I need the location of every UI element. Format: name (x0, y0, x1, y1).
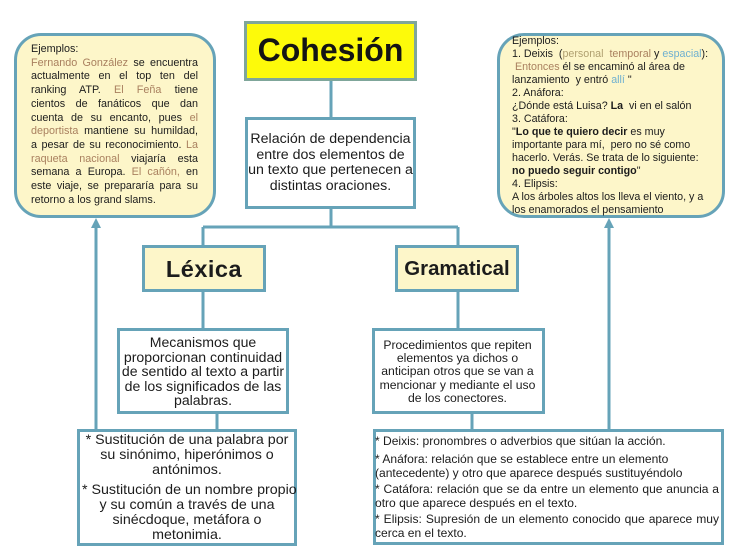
Léxica examples text (82, 432, 297, 543)
Léxica examples text: su sinónimo, hiperónimos o (100, 447, 274, 463)
left examples text: Fernando González se encuentra (31, 57, 198, 69)
right examples text: 1. Deixis (personal temporal y espacial): (512, 48, 708, 60)
Gramatical examples text: (antecedente) y otro que aparece después sustituyéndolo (375, 466, 682, 480)
Léxica description text: de los significados de las (125, 378, 281, 394)
left examples text: cuenta de su encanto, pues el (31, 112, 198, 124)
definition text: distintas oraciones. (270, 178, 391, 194)
right examples text: los enamorados el pensamiento (512, 204, 664, 216)
Gramatical examples text: otro que aparece después en el texto. (375, 496, 577, 510)
left examples text: a pesar de su reconocimiento. La (31, 139, 198, 151)
Gramatical examples text: * Catáfora: relación que se da entre un elemento que anuncia a (375, 482, 719, 496)
definition box (245, 117, 416, 209)
left examples text: ranking ATP. El Feña tiene (31, 84, 198, 96)
Léxica description text: palabras. (174, 392, 232, 408)
right examples text (512, 35, 708, 216)
Léxica examples text: metonimia. (152, 527, 222, 543)
right examples text: "Lo que te quiero decir es muy (512, 126, 665, 138)
left examples text: Ejemplos: (31, 43, 78, 55)
Gramatical description text: mencionar y mediante el uso (380, 378, 535, 392)
Léxica description text: proporcionan continuidad (124, 349, 282, 365)
right examples text: no puedo seguir contigo" (512, 165, 640, 177)
right examples text: lanzamiento y entró allí " (512, 74, 632, 86)
left examples text (31, 43, 198, 206)
left examples panel (14, 33, 216, 218)
Gramatical examples text (375, 434, 719, 540)
left examples text: semana a Europa. El cañón, en (31, 166, 198, 178)
Gramatical examples text: * Elipsis: Supresión de un elemento conocido que aparece muy (375, 512, 719, 526)
left examples text: deportista mantiene su humildad, (31, 125, 198, 137)
Gramatical description text (380, 338, 535, 405)
heading: Gramatical: Gramatical (404, 258, 510, 280)
Léxica examples box (77, 429, 297, 546)
heading box: Léxica (142, 245, 266, 292)
Léxica description box (117, 328, 289, 414)
right examples text: importante para mí, pero no sé como (512, 139, 690, 151)
heading: Léxica: Léxica (166, 256, 242, 282)
Léxica examples text: * Sustitución de una palabra por (86, 432, 288, 448)
left examples text: actualmente en el top ten del (31, 70, 198, 82)
left examples text: este viaje, se prepararía para su (31, 180, 198, 192)
left examples text: cientos de fanáticos que dan (31, 98, 198, 110)
definition text: Relación de dependencia (250, 131, 411, 147)
Léxica description text: Mecanismos que (150, 334, 256, 350)
Léxica examples text: sinécdoque, metáfora o (113, 512, 261, 528)
Gramatical description text: elementos ya dichos o (397, 351, 518, 365)
Léxica description text (122, 334, 284, 408)
right examples text: A los árboles altos los lleva el viento, y a (512, 191, 703, 203)
right examples text: Entonces él se encaminó al área de (515, 61, 685, 73)
Gramatical examples text: cerca en el texto. (375, 526, 467, 540)
Léxica examples text: antónimos. (152, 462, 222, 478)
right examples text: 4. Elipsis: (512, 178, 558, 190)
Gramatical description text: anticipan otros que se van a (381, 364, 534, 378)
Gramatical examples box (373, 429, 724, 545)
right examples text: 3. Catáfora: (512, 113, 568, 125)
Gramatical examples text: * Anáfora: relación que se establece entre un elemento (375, 452, 668, 466)
definition text: entre dos elementos de (256, 147, 405, 163)
title box (244, 21, 417, 81)
Léxica examples text: * Sustitución de un nombre propio (82, 482, 297, 498)
Gramatical description text: de los conectores. (408, 391, 507, 405)
title: Cohesión (258, 32, 403, 68)
right examples text: hacerlo. Verás. Se trata de lo siguiente: (512, 152, 699, 164)
left examples text: retorno a los grand slams. (31, 194, 156, 206)
left examples text: raqueta nacional viajaría esta (31, 153, 198, 165)
right examples text: Ejemplos: (512, 35, 559, 47)
Léxica description text: de sentido al texto a partir (122, 363, 284, 379)
definition text: un texto que pertenecen a (248, 162, 413, 178)
right examples panel (497, 33, 725, 218)
right examples text: 2. Anáfora: (512, 87, 564, 99)
Gramatical description box (372, 328, 545, 414)
heading box: Gramatical (395, 245, 519, 292)
Léxica examples text: y su común a través de una (99, 497, 275, 513)
definition text (248, 131, 413, 194)
right examples text: ¿Dónde está Luisa? La vi en el salón (512, 100, 691, 112)
Gramatical description text: Procedimientos que repiten (383, 338, 532, 352)
Gramatical examples text: * Deixis: pronombres o adverbios que sitúan la acción. (375, 434, 666, 448)
